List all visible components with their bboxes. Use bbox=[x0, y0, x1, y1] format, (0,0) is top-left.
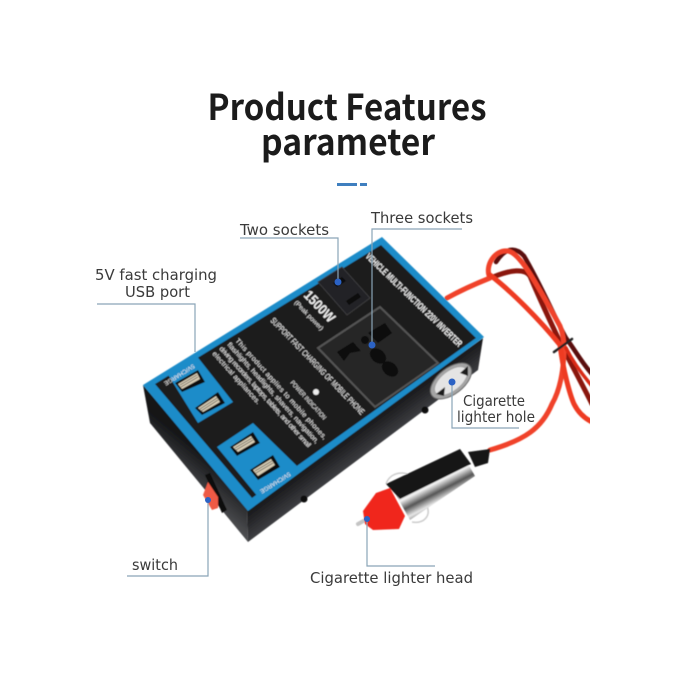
callout: USB port: 5V fast charging bbox=[95, 266, 217, 284]
callout: cigarette lighter hole: Cigarette bbox=[463, 392, 525, 410]
callout: cigarette lighter hole bbox=[448, 378, 535, 428]
USB panel upper bbox=[163, 355, 233, 423]
callout: two sockets bbox=[239, 221, 342, 286]
inverter body bbox=[143, 237, 484, 542]
callout: switch bbox=[127, 497, 211, 576]
callout: switch: switch bbox=[132, 556, 178, 574]
spring clips bbox=[386, 473, 428, 522]
plug tip pin bbox=[358, 518, 369, 524]
cable tie bbox=[554, 339, 572, 352]
printed device text: electrical appliances. bbox=[211, 351, 261, 406]
black upper barrel bbox=[386, 449, 471, 499]
printed device text bbox=[211, 251, 464, 450]
title: parameter bbox=[261, 114, 435, 166]
three-socket outlet bbox=[318, 307, 438, 407]
printed device text: VEHICLE MULTI-FUNCTION 220V INVERTER bbox=[363, 251, 464, 350]
callout: cigarette lighter head bbox=[310, 516, 473, 587]
red power cable bbox=[447, 250, 592, 450]
printed device text: This product applies to mobile phones, bbox=[234, 338, 328, 441]
printed device text: flashlights, headlights, shavers, navigation, bbox=[226, 342, 320, 445]
left side face bbox=[143, 385, 248, 542]
top face black panel bbox=[155, 245, 476, 498]
two-socket outlet bbox=[318, 267, 370, 315]
callout: three sockets bbox=[368, 209, 473, 348]
callout: cigarette lighter head: Cigarette lighter head bbox=[310, 569, 473, 587]
cigarette lighter plug bbox=[358, 449, 490, 530]
USB panel lower: 5V/CHARGE bbox=[259, 470, 291, 494]
printed device text: 1500W bbox=[301, 287, 339, 326]
printed device text: SUPPORT FAST CHARGING OF MOBILE PHONE bbox=[269, 315, 367, 417]
USB panel lower bbox=[217, 423, 297, 497]
cigarette lighter hole bbox=[424, 356, 478, 406]
callout: cigarette lighter hole: lighter hole bbox=[457, 408, 535, 426]
accent dash bbox=[337, 183, 367, 186]
printed device text: (Peak power) bbox=[293, 300, 324, 332]
callout: two sockets: Two sockets bbox=[239, 221, 329, 239]
small feet screws bbox=[300, 406, 428, 502]
callout: USB port bbox=[95, 266, 217, 352]
black strain relief bbox=[468, 449, 490, 467]
metal barrel bbox=[390, 450, 475, 520]
callout: three sockets: Three sockets bbox=[370, 209, 473, 227]
printed device text: driving recorders, laptops, tablets, and other small bbox=[218, 346, 312, 450]
USB panel upper: 5V/CHARGE bbox=[163, 362, 195, 386]
printed device text: POWER INDICATION bbox=[289, 380, 327, 422]
title bbox=[208, 79, 486, 166]
title: Product Features bbox=[208, 79, 486, 131]
right side face bbox=[247, 338, 483, 542]
callout: USB port: USB port bbox=[125, 283, 190, 301]
rocker switch bbox=[203, 473, 227, 513]
top face blue frame bbox=[143, 237, 484, 511]
red plug cap bbox=[363, 488, 405, 530]
